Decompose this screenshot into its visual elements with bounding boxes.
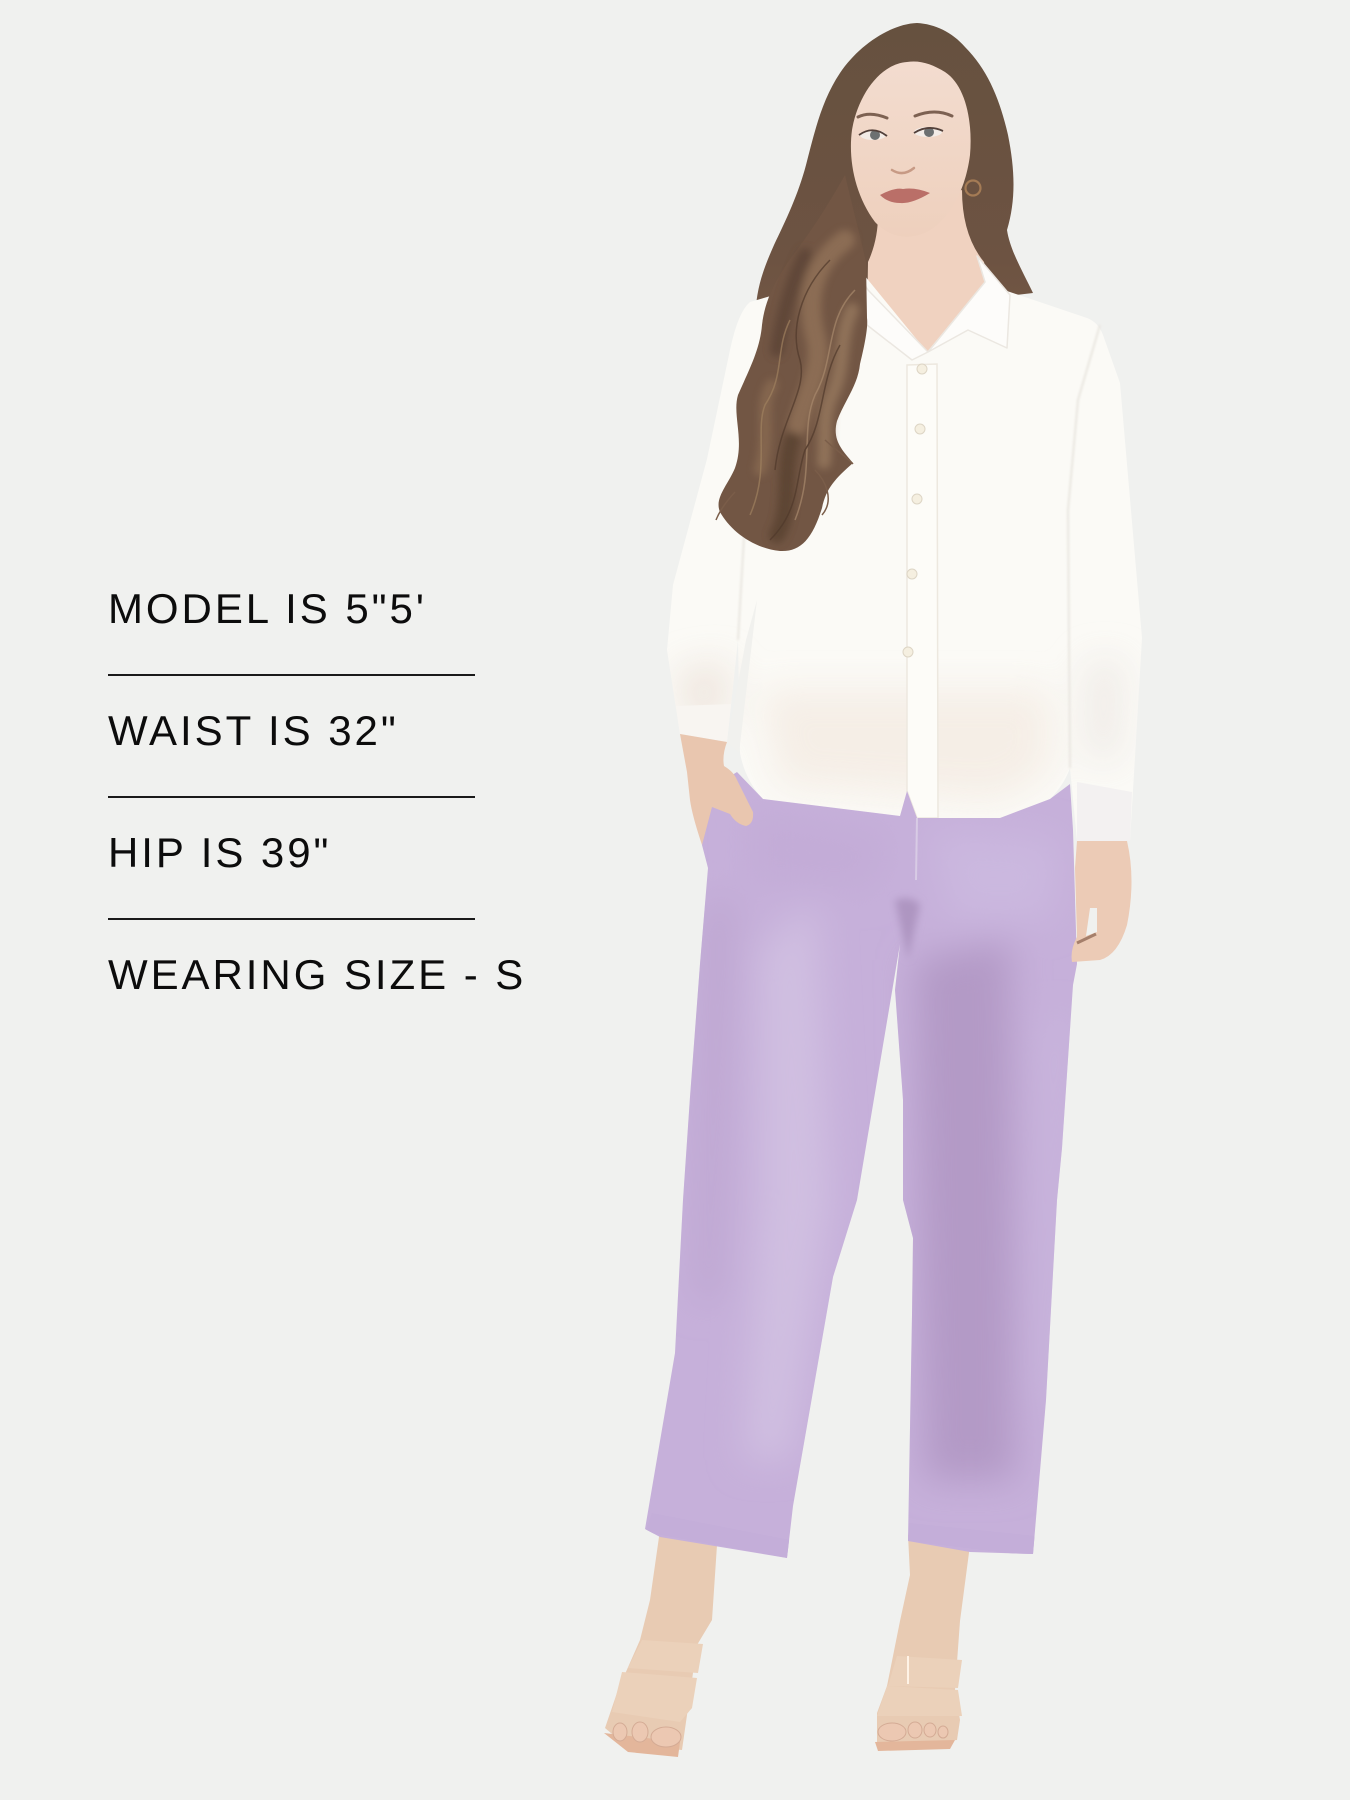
left toes — [613, 1722, 681, 1747]
shirt: collar — [853, 256, 1010, 360]
shirt: cuffs — [1077, 782, 1132, 841]
hair: light highlights — [760, 240, 852, 535]
neck — [867, 190, 990, 354]
shirt: body and sleeves — [667, 270, 1142, 841]
panel: model measurements — [108, 585, 526, 998]
text: hip: HIP IS 39" — [108, 829, 331, 876]
right sandal straps — [877, 1656, 962, 1716]
trousers: base shape — [645, 772, 1077, 1558]
hair: front strands over shirt — [716, 175, 867, 551]
shirt — [667, 256, 1142, 841]
right hand: thumb shadow — [1077, 934, 1096, 943]
face: eyebrows — [858, 112, 952, 118]
left hand in pocket — [680, 734, 753, 845]
shirt: placket — [907, 364, 938, 818]
hair: flyaway strands — [716, 440, 853, 520]
left sandal sole — [604, 1733, 680, 1757]
face: nose — [892, 168, 914, 173]
right toes — [878, 1722, 948, 1741]
hair: main wavy mass — [719, 175, 867, 551]
right hand — [1072, 841, 1132, 962]
shirt: sleeve seams — [738, 325, 1100, 768]
illustration: model in white shirt and lilac trousers — [604, 23, 1142, 1757]
right leg and foot — [877, 1535, 970, 1747]
text: wearing size: WEARING SIZE - S — [108, 951, 526, 998]
trousers: shading — [700, 924, 1022, 1486]
left leg and foot — [605, 1530, 717, 1750]
icon: hoop earring — [966, 180, 980, 196]
face: eyes — [859, 127, 943, 140]
right sandal sole — [875, 1740, 955, 1751]
text: waist: WAIST IS 32" — [108, 707, 399, 754]
trousers: centre seam — [916, 818, 917, 880]
face: lips — [880, 188, 930, 203]
right sandal highlight — [907, 1656, 909, 1684]
face: skin — [851, 61, 971, 237]
right hand: palm and fingers — [1072, 841, 1132, 962]
legs and sandals — [604, 1530, 970, 1757]
shirt: fabric shading — [675, 660, 1125, 800]
text: model height: MODEL IS 5"5' — [108, 585, 427, 632]
face — [851, 61, 980, 237]
trousers — [645, 772, 1077, 1558]
right hand: finger gap — [1086, 908, 1097, 936]
left sandal straps — [612, 1640, 703, 1722]
shirt: gap between sleeve and body — [727, 600, 757, 753]
shirt: buttons — [903, 364, 927, 657]
hair: back layer — [717, 23, 1033, 551]
trousers: crotch shadow — [895, 898, 920, 960]
hair: fine strand texture — [750, 260, 855, 540]
trousers: hems — [646, 1530, 1034, 1558]
